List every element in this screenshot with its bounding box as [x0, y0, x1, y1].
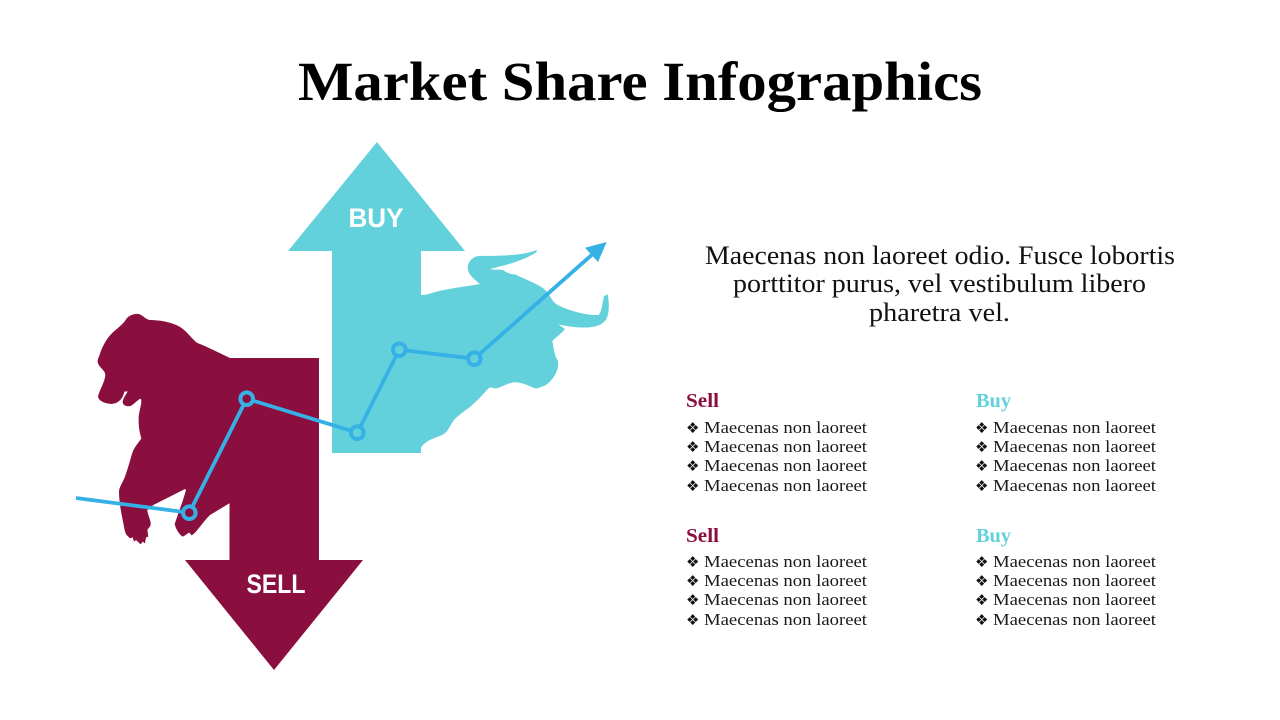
list: sell bottom: ❖	[686, 553, 699, 571]
list: sell bottom: ❖	[686, 572, 699, 590]
list: sell top: Maecenas non laoreet	[704, 476, 867, 495]
list: sell bottom: Maecenas non laoreet	[704, 610, 867, 629]
list: buy top: Buy	[976, 390, 1011, 412]
intro paragraph: pharetra vel.	[869, 298, 1010, 327]
intro paragraph: porttitor purus, vel vestibulum libero	[733, 269, 1146, 298]
list: buy bottom: Maecenas non laoreet	[993, 610, 1156, 629]
list: sell bottom: ❖	[686, 611, 699, 629]
buy label: BUY	[348, 203, 404, 233]
icon: bear silhouette	[98, 314, 233, 544]
intro paragraph	[705, 241, 1175, 327]
trend line with arrow	[76, 242, 607, 519]
list: sell bottom: ❖	[686, 591, 699, 609]
list: sell bottom: Maecenas non laoreet	[704, 552, 867, 571]
list: buy bottom: ❖	[975, 553, 988, 571]
list: buy top: ❖	[975, 477, 988, 495]
list: buy bottom: Maecenas non laoreet	[993, 571, 1156, 590]
icon: bull silhouette	[397, 250, 609, 453]
list: sell bottom	[686, 525, 867, 629]
list: sell top: Maecenas non laoreet	[704, 437, 867, 456]
list: buy top: Maecenas non laoreet	[993, 476, 1156, 495]
list: sell top: ❖	[686, 419, 699, 437]
title: Market Share Infographics	[298, 51, 982, 112]
list: sell top: ❖	[686, 457, 699, 475]
list: sell bottom: Sell	[686, 525, 719, 547]
illustration: bull, bear and market line	[76, 142, 609, 670]
list: buy bottom: ❖	[975, 591, 988, 609]
list: buy bottom	[975, 525, 1156, 629]
sell arrow	[185, 358, 363, 670]
list: sell top: Maecenas non laoreet	[704, 418, 867, 437]
list: sell top: Maecenas non laoreet	[704, 456, 867, 475]
list: sell top: Sell	[686, 390, 719, 412]
list: sell top: ❖	[686, 477, 699, 495]
list: sell top	[686, 390, 867, 495]
list: sell bottom: Maecenas non laoreet	[704, 571, 867, 590]
list: sell top: ❖	[686, 438, 699, 456]
list: buy bottom: Maecenas non laoreet	[993, 590, 1156, 609]
list: buy bottom: ❖	[975, 572, 988, 590]
list: buy bottom: ❖	[975, 611, 988, 629]
sell label: SELL	[246, 569, 306, 599]
list: buy top: ❖	[975, 457, 988, 475]
list: buy top: Maecenas non laoreet	[993, 437, 1156, 456]
list: buy top: Maecenas non laoreet	[993, 418, 1156, 437]
list: buy top	[975, 390, 1156, 495]
list: buy top: ❖	[975, 438, 988, 456]
list: buy bottom: Maecenas non laoreet	[993, 552, 1156, 571]
buy arrow	[288, 142, 465, 453]
intro paragraph: Maecenas non laoreet odio. Fusce lobortis	[705, 241, 1175, 270]
list: sell bottom: Maecenas non laoreet	[704, 590, 867, 609]
list: buy top: Maecenas non laoreet	[993, 456, 1156, 475]
list: buy top: ❖	[975, 419, 988, 437]
list: buy bottom: Buy	[976, 525, 1011, 547]
